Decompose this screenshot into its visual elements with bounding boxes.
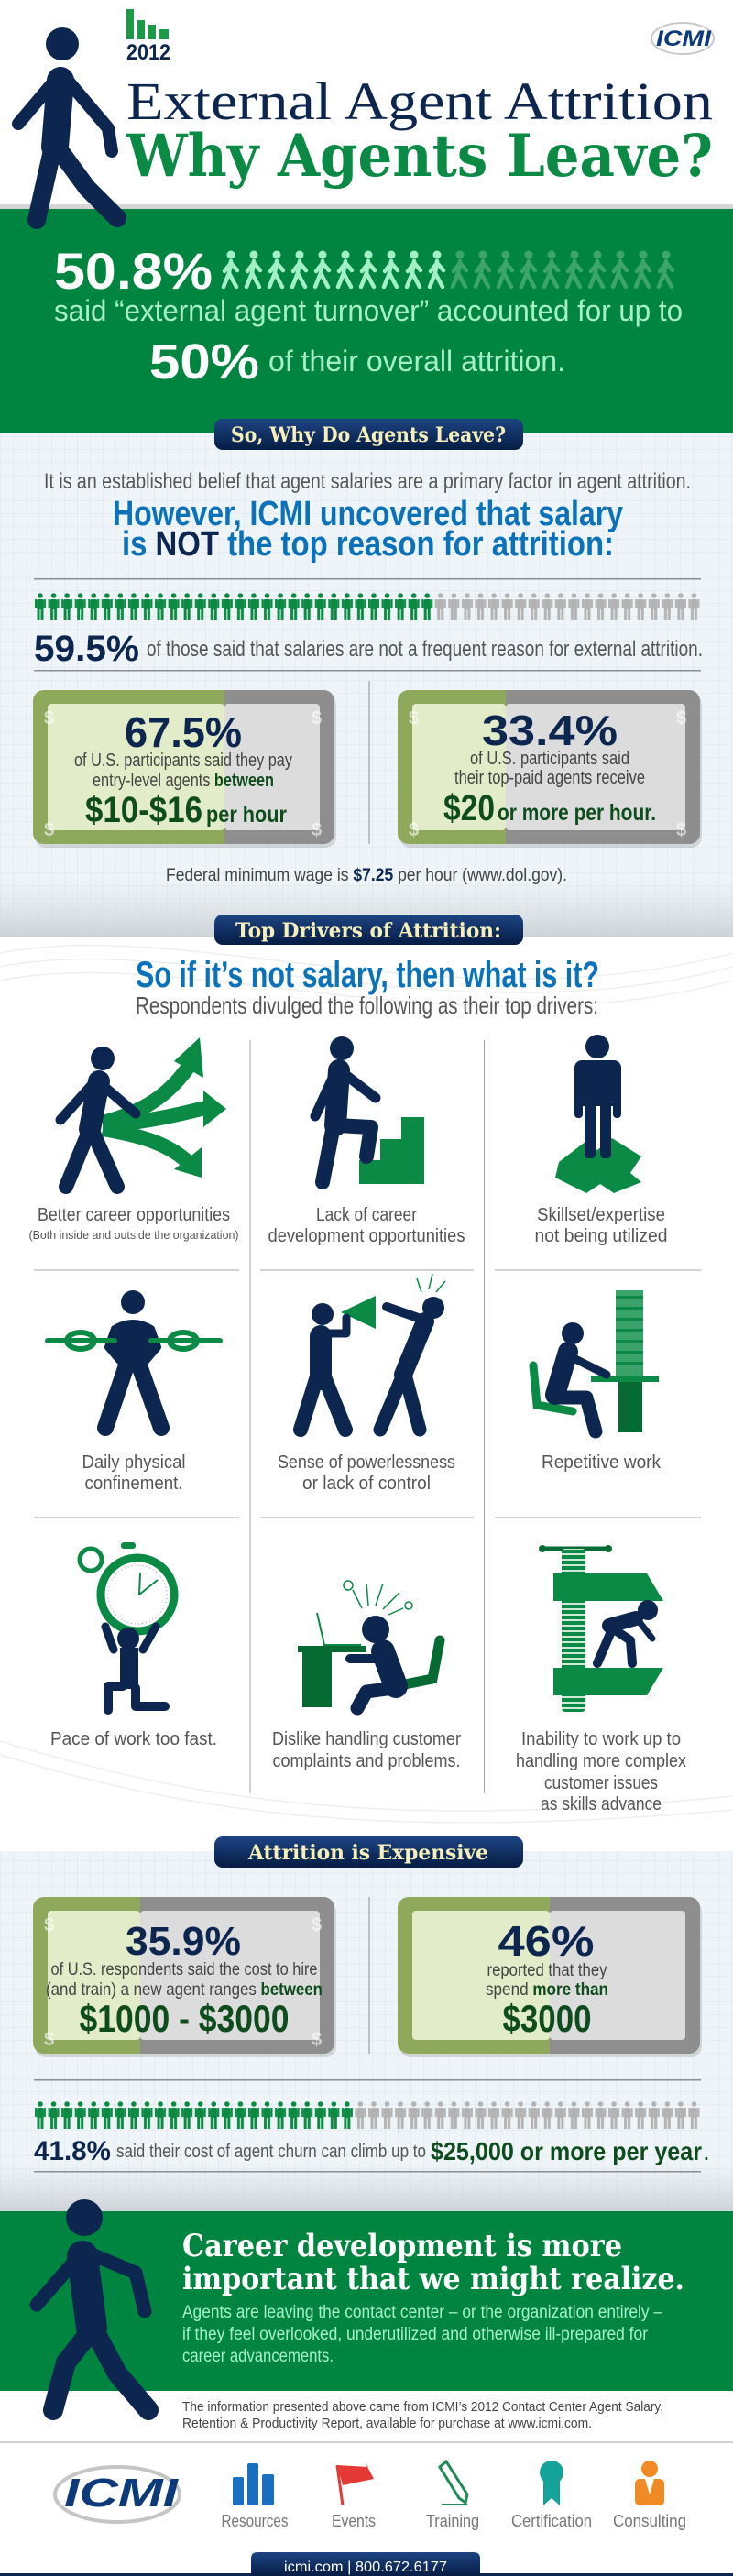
stat: 59.5% <box>34 629 703 669</box>
bill: 67.5%: 67.5% <box>125 708 242 756</box>
badge: Attrition is Expensive <box>214 1836 523 1868</box>
logo: 2012 <box>126 9 170 65</box>
background: top grid section <box>0 433 733 937</box>
driver: inability to work up: as skills advance <box>541 1794 662 1814</box>
bill: 33.4%: $20 <box>443 788 495 828</box>
driver: daily physical confinement <box>48 1290 220 1494</box>
background: drivers section <box>0 937 733 1851</box>
footer icon: Training: Training <box>426 2512 479 2530</box>
bill: 67.5%: per hour <box>206 802 287 828</box>
badge: So, Why Do Agents Leave?: So, Why Do Agents Leave? <box>231 423 506 447</box>
stat: 41.8%: $25,000 or more per year <box>431 2137 702 2165</box>
panel: career development conclusion: Career development is more <box>182 2228 622 2264</box>
icon: bottom walking man <box>37 2199 148 2410</box>
driver: skillset not utilized: not being utilized <box>535 1226 667 1246</box>
icon: man holding clock <box>80 1542 174 1710</box>
logo: ICMI top <box>651 23 714 54</box>
icon: man climbing stairs <box>315 1036 424 1184</box>
icon row: 41.8% people <box>34 2101 701 2129</box>
driver: dislike handling complaints: complaints and problems. <box>273 1751 460 1771</box>
bill: 33.4%: their top-paid agents receive <box>454 768 645 788</box>
bill: 67.5%: of U.S. participants said they pay <box>74 751 292 771</box>
footer icon: Resources: Resources <box>222 2512 288 2530</box>
driver: dislike handling complaints: Dislike handling customer <box>272 1729 461 1749</box>
icon: man with arrows <box>60 1037 226 1187</box>
icon: chained man <box>48 1290 220 1428</box>
driver: daily physical confinement: confinement. <box>84 1474 183 1494</box>
badge: Top Drivers of Attrition: Top Drivers of Attrition: <box>235 919 501 943</box>
driver: inability to work up: Inability to work up to <box>521 1729 681 1749</box>
icon: stressed man at laptop <box>298 1581 440 1708</box>
stat: 50%: 50% <box>149 334 259 389</box>
driver: skillset not utilized <box>535 1035 667 1246</box>
bill: 46%: $3000 <box>502 1997 592 2040</box>
bill: 67.5%: $10-$16 <box>85 790 202 830</box>
panel: career development conclusion: career advancements. <box>182 2347 334 2366</box>
driver: sense of powerlessness <box>278 1274 455 1494</box>
heading: so if it's not salary <box>136 955 599 1019</box>
footer bar: contact <box>0 2552 733 2576</box>
stat: 41.8% <box>34 2136 710 2166</box>
bill: 33.4%: or more per hour. <box>498 800 656 826</box>
bill: 33.4%: $ <box>409 708 419 729</box>
logo: 2012: 2012 <box>126 40 170 65</box>
text: source note: The information presented above came from ICMI’s 2012 Contact Center Agent Salary, <box>182 2399 663 2415</box>
driver: lack of career development <box>268 1036 465 1246</box>
driver: pace of work too fast: Pace of work too fast. <box>50 1729 217 1749</box>
footer icon: Certification: Certification <box>511 2512 592 2530</box>
bill: 33.4%: $ <box>409 820 419 840</box>
bill: 33.4%: $ <box>676 820 686 840</box>
text: external turnover: said “external agent turnover” accounted for up to <box>54 294 683 327</box>
logo: ICMI top: ICMI <box>656 27 713 51</box>
footer icon: Consulting <box>613 2461 686 2530</box>
heading: so if it's not salary: Respondents divulged the following as their top drivers: <box>136 992 598 1019</box>
stat: 41.8%: 41.8% <box>34 2136 111 2166</box>
bill: 46%: spend more than <box>486 1980 608 2000</box>
title: External Agent Attrition <box>126 71 713 131</box>
heading: salary is NOT the top reason: However, ICMI uncovered that salary <box>113 495 623 533</box>
driver: inability to work up <box>516 1545 686 1814</box>
driver: better career opportunities: Better career opportunities <box>38 1205 230 1225</box>
panel: career development conclusion: Agents are leaving the contact center – or the organization entirely – <box>182 2303 662 2322</box>
footer icon: Consulting: Consulting <box>613 2512 686 2530</box>
footer logo: ICMI: ICMI <box>64 2471 179 2516</box>
footer icon: Events <box>332 2461 376 2530</box>
bill: 67.5%: $ <box>44 708 54 729</box>
heading: salary is NOT the top reason <box>113 495 623 564</box>
stat: 41.8%: . <box>703 2137 710 2165</box>
bill: 35.9%: $ <box>44 1915 54 1935</box>
bill: 67.5%: $ <box>312 820 322 840</box>
title <box>126 71 713 191</box>
panel: green stat band: of their overall attrition. <box>268 345 565 378</box>
bill: 46%: reported that they <box>487 1961 607 1980</box>
driver: pace of work too fast <box>50 1542 217 1749</box>
footer logo: ICMI <box>55 2467 180 2522</box>
driver: lack of career development: development opportunities <box>268 1226 465 1246</box>
bill: 33.4%: 33.4% <box>482 707 618 754</box>
driver: sense of powerlessness: or lack of control <box>302 1474 431 1494</box>
stat: 59.5%: 59.5% <box>34 629 139 669</box>
driver: better career opportunities: (Both inside and outside the organization) <box>29 1228 238 1242</box>
driver: sense of powerlessness: Sense of powerlessness <box>278 1452 455 1473</box>
footer icon: Events: Events <box>332 2512 376 2530</box>
text: source note: Retention & Productivity Report, available for purchase at www.icmi.com. <box>182 2416 592 2431</box>
bill: 46% <box>398 1897 702 2057</box>
background: header <box>0 0 733 209</box>
badge: Attrition is Expensive: Attrition is Expensive <box>247 1841 488 1865</box>
footer icon: Certification <box>511 2461 592 2530</box>
icon: big walking man <box>18 27 117 220</box>
footer icon: Training <box>426 2461 479 2530</box>
grid dividers <box>34 1040 701 1793</box>
bill: 35.9%: $1000 - $3000 <box>79 1997 290 2040</box>
driver: inability to work up: customer issues <box>544 1773 658 1793</box>
bill: 35.9%: $ <box>312 1915 322 1935</box>
driver: better career opportunities <box>29 1037 238 1242</box>
heading: salary is NOT the top reason: is NOT the top reason for attrition: <box>122 525 614 564</box>
text: federal minimum wage: Federal minimum wage is $7.25 per hour (www.dol.gov). <box>166 866 567 885</box>
driver: repetitive work <box>533 1290 662 1473</box>
driver: lack of career development: Lack of career <box>316 1205 417 1225</box>
panel: green stat band <box>0 204 733 433</box>
bill: 35.9%: $ <box>44 2030 54 2050</box>
text: source note <box>182 2399 663 2431</box>
stat: 41.8%: said their cost of agent churn can climb up to <box>116 2142 426 2162</box>
background: expensive grid section <box>0 1851 733 2211</box>
bill: 46%: 46% <box>498 1917 594 1965</box>
bill: 35.9%: 35.9% <box>126 1919 241 1964</box>
driver: skillset not utilized: Skillset/expertise <box>537 1205 665 1225</box>
bill: 67.5%: $ <box>312 708 322 729</box>
icon row: walking people <box>220 250 678 289</box>
bill: 35.9%: of U.S. respondents said the cost to hire <box>51 1960 317 1979</box>
badge: Top Drivers of Attrition <box>214 915 523 945</box>
driver: daily physical confinement: Daily physical <box>82 1452 185 1473</box>
panel: career development conclusion <box>0 2211 733 2391</box>
stat: 50.8%: 50.8% <box>54 242 213 300</box>
panel: career development conclusion: if they feel overlooked, underutilized and otherwise ill-prepared for <box>182 2325 649 2344</box>
bill: 35.9% <box>33 1897 336 2057</box>
bill: 33.4%: $ <box>676 708 686 729</box>
driver: dislike handling complaints <box>272 1581 461 1771</box>
bill: 33.4%: of U.S. participants said <box>470 749 629 769</box>
bill: 67.5%: $ <box>44 820 54 840</box>
driver: inability to work up: handling more complex <box>516 1751 686 1771</box>
bill: 35.9%: (and train) a new agent ranges between <box>46 1980 323 2000</box>
bill: 33.4% <box>398 690 702 848</box>
footer bar: contact: icmi.com | 800.672.6177 <box>284 2560 447 2575</box>
footer icon: Resources <box>222 2463 288 2530</box>
icon: megaphone yelling <box>301 1274 445 1430</box>
driver: repetitive work: Repetitive work <box>542 1452 662 1473</box>
icon row: 59.5% people <box>34 593 701 620</box>
bill: 67.5%: entry-level agents between <box>93 771 274 791</box>
heading: so if it's not salary: So if it’s not salary, then what is it? <box>136 955 599 995</box>
icon: man on puzzle piece <box>555 1035 641 1193</box>
icon: paper stack at desk <box>533 1290 659 1432</box>
bill: 67.5% <box>33 690 336 848</box>
bill: 35.9%: $ <box>312 2030 322 2050</box>
icon: man in vise <box>539 1545 663 1712</box>
